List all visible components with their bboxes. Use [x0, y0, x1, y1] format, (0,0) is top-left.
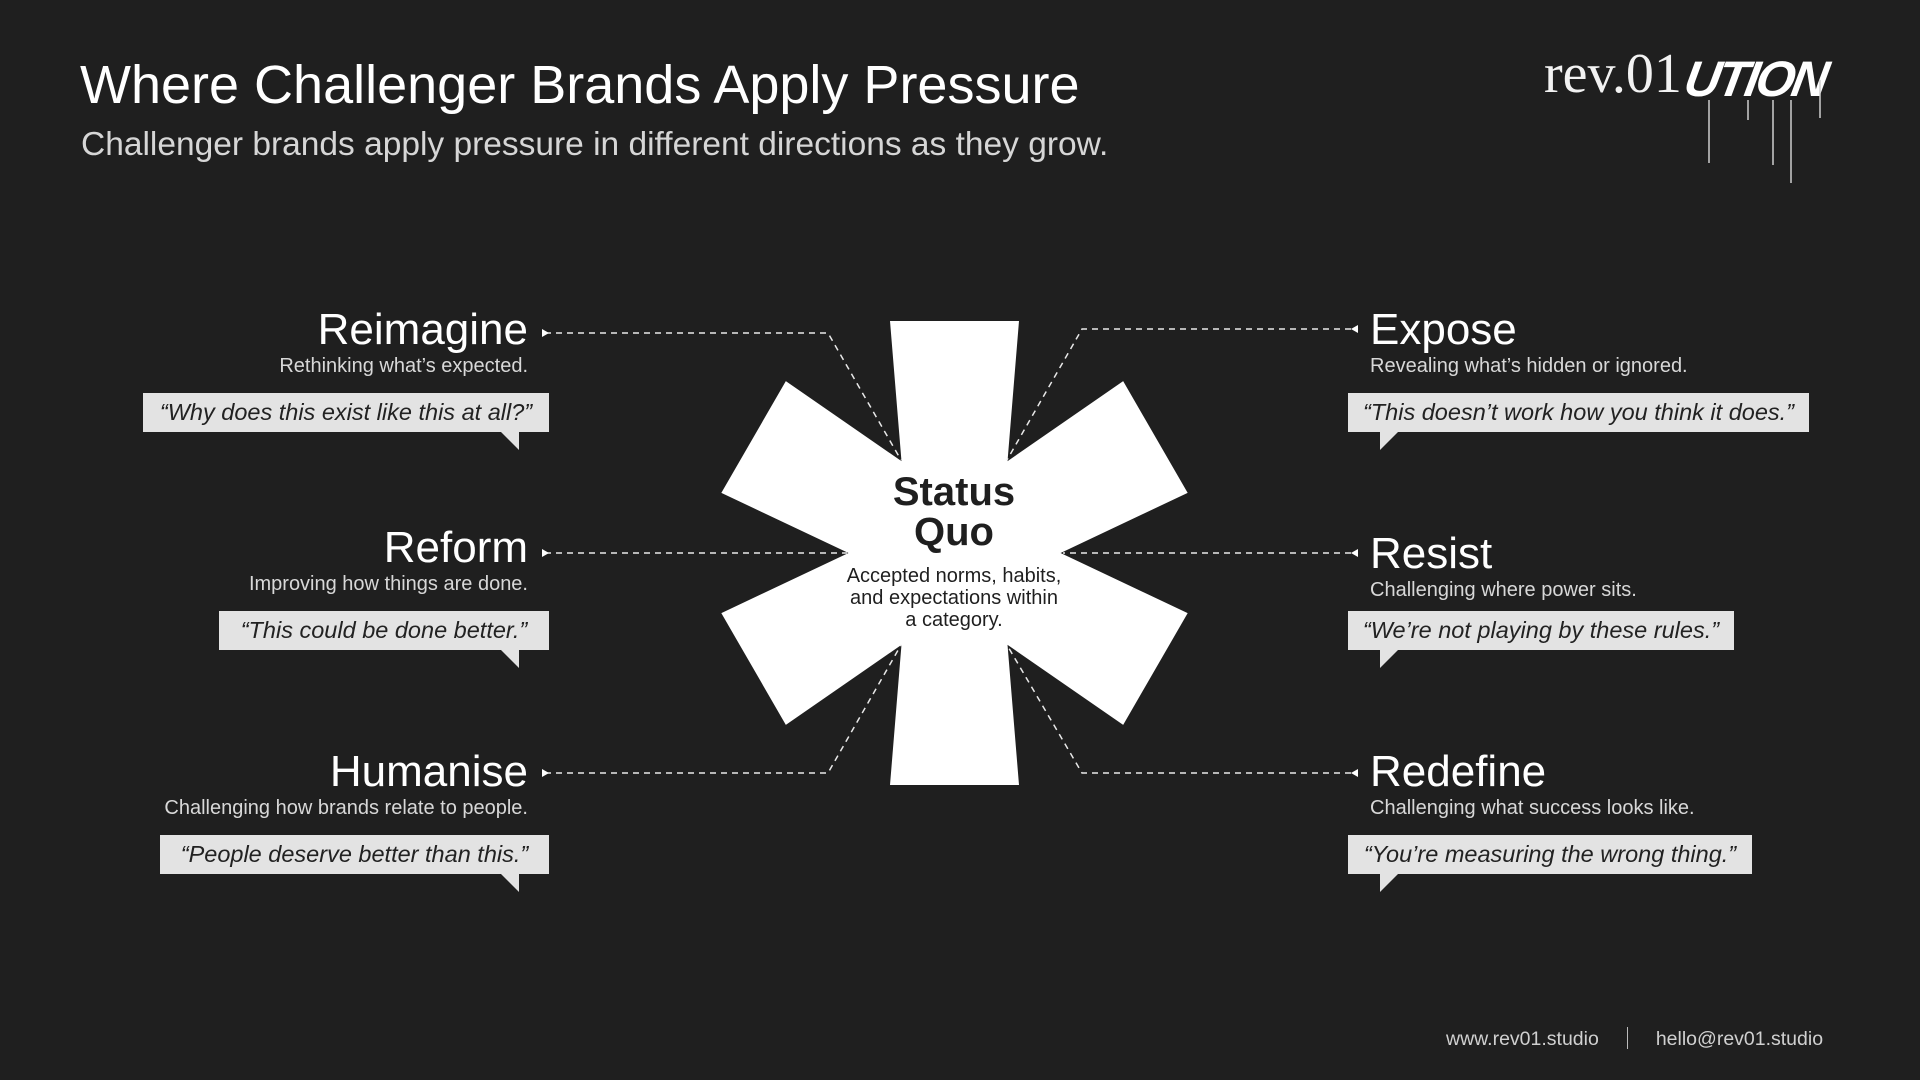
center text: Accepted norms, habits, [847, 565, 1061, 587]
center text: Status [893, 470, 1015, 514]
connectors [545, 329, 1351, 773]
callout: Redefine: “You’re measuring the wrong thing.” [1364, 841, 1736, 867]
panel: Redefine: Challenging what success looks like. [1370, 797, 1695, 819]
panel: Redefine [1370, 747, 1695, 819]
panel: Reimagine: Reimagine [318, 305, 528, 354]
title: Where Challenger Brands Apply Pressure [80, 55, 1080, 115]
panel: Resist [1370, 529, 1637, 601]
callout: Reimagine [143, 393, 549, 432]
panel: Expose: Revealing what’s hidden or ignored. [1370, 355, 1688, 377]
callout: Reform: “This could be done better.” [241, 617, 527, 643]
panel: Reform: Reform [384, 523, 528, 572]
panel: Reform: Improving how things are done. [249, 573, 528, 595]
footer: www.rev01.studio hello@rev01.studio [1446, 1028, 1823, 1050]
center text [847, 470, 1061, 631]
logo: UTION [1680, 51, 1830, 107]
panel: Expose [1370, 305, 1688, 377]
callout: Humanise: “People deserve better than this.” [181, 841, 528, 867]
center text: and expectations within [850, 587, 1058, 609]
callout: Reform [219, 611, 549, 650]
logo: rev.01 [1544, 43, 1682, 105]
subtitle: Challenger brands apply pressure in different directions as they grow. [81, 126, 1108, 163]
panel: Reimagine: Rethinking what’s expected. [279, 355, 528, 377]
panel: Humanise: Challenging how brands relate to people. [164, 797, 528, 819]
asterisk [721, 321, 1188, 785]
callout: Expose [1348, 393, 1809, 432]
logo [1544, 43, 1832, 183]
center text: a category. [905, 609, 1003, 631]
callout: Redefine [1348, 835, 1752, 874]
callout: Humanise [160, 835, 549, 874]
callout: Resist [1348, 611, 1734, 650]
panel: Reimagine [279, 305, 528, 377]
callout: Expose: “This doesn’t work how you think it does.” [1363, 399, 1794, 425]
panel: Expose: Expose [1370, 305, 1517, 354]
panel: Resist: Challenging where power sits. [1370, 579, 1637, 601]
center text: Quo [914, 510, 994, 554]
panel: Redefine: Redefine [1370, 747, 1546, 796]
callout: Reimagine: “Why does this exist like this at all?” [160, 399, 532, 425]
panel: Humanise [164, 747, 528, 819]
panel: Humanise: Humanise [330, 747, 528, 796]
callout: Resist: “We’re not playing by these rules.” [1363, 617, 1719, 643]
panel: Reform [249, 523, 528, 595]
panel: Resist: Resist [1370, 529, 1492, 578]
